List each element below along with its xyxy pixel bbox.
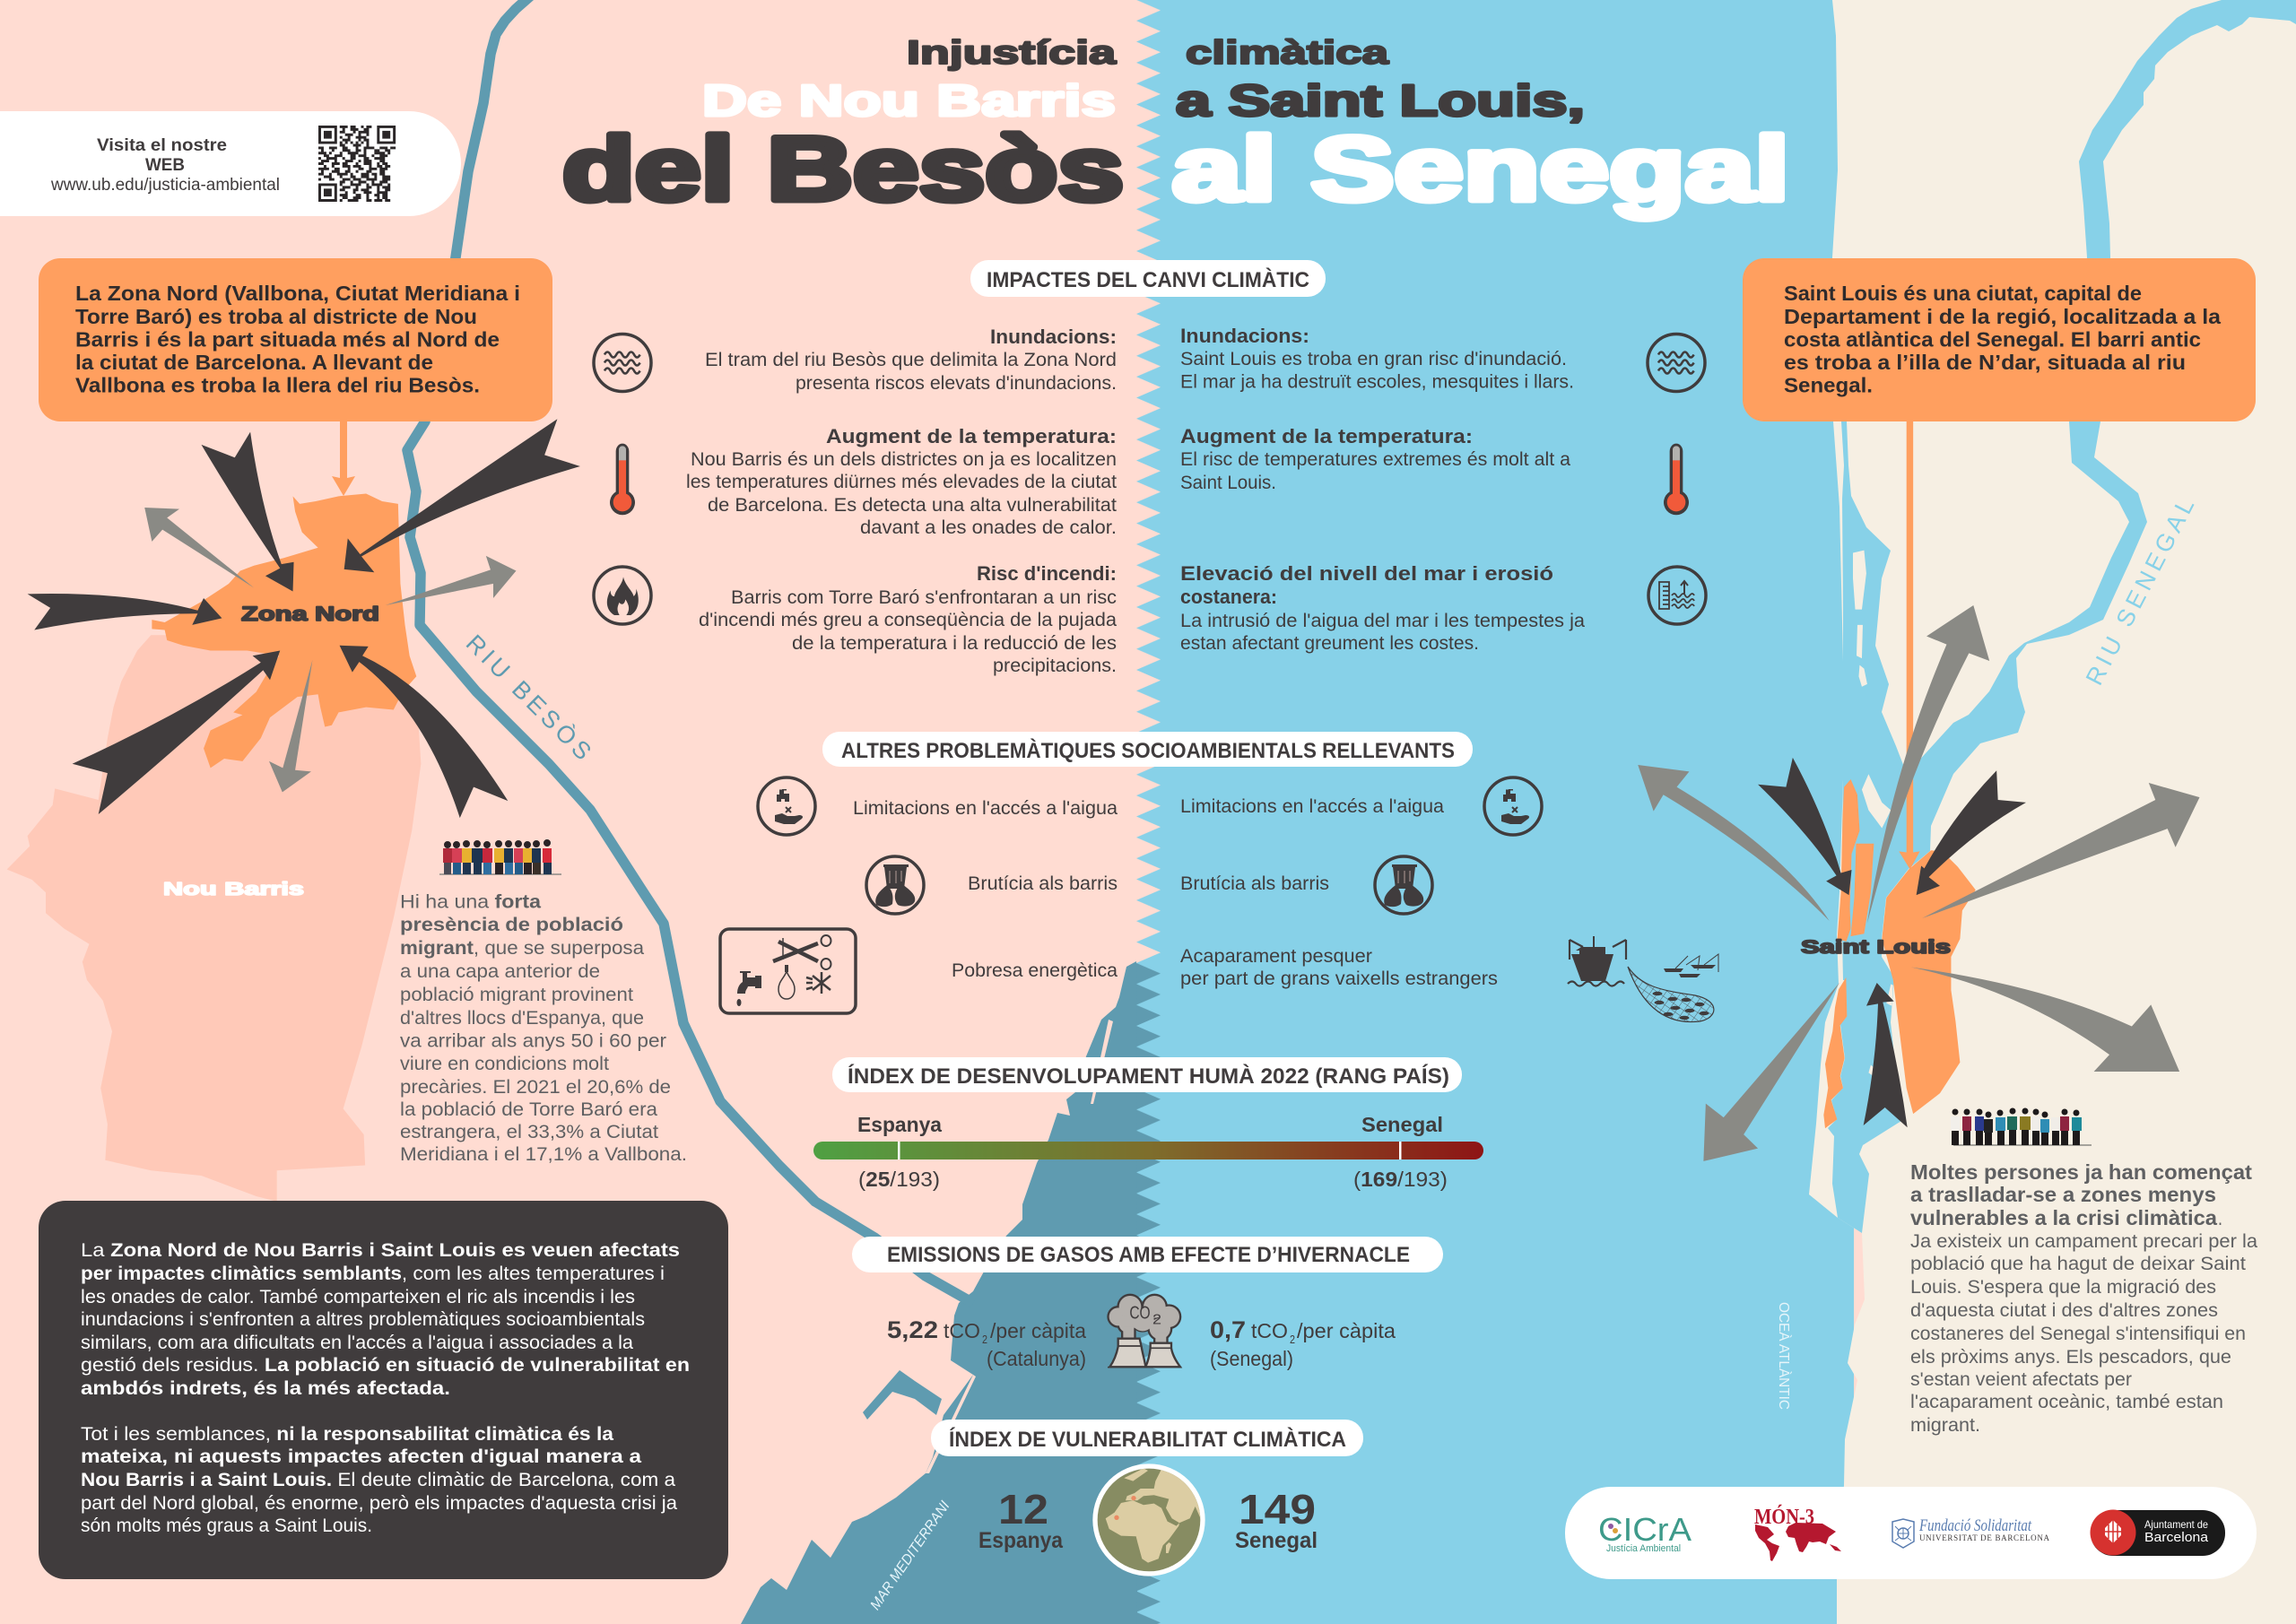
text: població migrant: Hi ha una forta xyxy=(400,891,541,913)
map shape: Nou Barris xyxy=(7,635,421,1202)
arrows: Saint Louis impacts xyxy=(1638,605,2199,1161)
text: emissions Senegal: 2 xyxy=(1290,1333,1295,1346)
text: migració Saint Louis: migrant. xyxy=(1910,1415,1980,1436)
text: impactes Nou Barris: precipitacions. xyxy=(993,656,1117,676)
text: impactes Nou Barris: les temperatures diürnes més elevades de la ciutat xyxy=(686,472,1117,492)
icon: incendi xyxy=(594,567,651,624)
panel: conclusió: per impactes climàtics semblants , com les altes temperatures i xyxy=(81,1264,665,1284)
text: impactes Saint Louis: Inundacions: xyxy=(1180,325,1309,347)
icon: inundacions Saint Louis xyxy=(1648,334,1705,391)
text: emissions Senegal: (Senegal) xyxy=(1210,1347,1293,1370)
text: emissions Catalunya: /per càpita xyxy=(990,1319,1086,1342)
panel: conclusió: similars, com ara dificultats en l'accés a l'aigua i associades a la xyxy=(81,1333,633,1353)
logo: CICrA: Justícia Ambiental xyxy=(1606,1543,1681,1554)
chart: barra IDH xyxy=(813,1113,1483,1191)
stat: Espanya 12 xyxy=(978,1486,1064,1553)
title: De Nou Barris xyxy=(702,77,1116,126)
panel: Zona Nord intro: La Zona Nord (Vallbona, Ciutat Meridiana i xyxy=(75,282,520,305)
text: emissions Senegal: tCO xyxy=(1251,1319,1288,1342)
text: emissions Catalunya: tCO xyxy=(944,1319,980,1342)
text: població migrant: viure en condicions molt xyxy=(400,1054,609,1074)
heading: emissions: EMISSIONS DE GASOS AMB EFECTE D’HIVERNACLE xyxy=(887,1243,1410,1267)
panel: conclusió: són molts més graus a Saint Louis. xyxy=(81,1515,372,1536)
orange arrow to Zona Nord xyxy=(332,417,355,496)
map shapes: Saint Louis xyxy=(1838,779,1976,1114)
panel: conclusió: part del Nord global, és enorme, però els impactes d'aquesta crisi ja xyxy=(81,1493,677,1514)
text: impactes Saint Louis: Saint Louis es troba en gran risc d'inundació. xyxy=(1180,349,1567,369)
text: migració Saint Louis: vulnerables a la crisi climàtica xyxy=(1910,1206,2217,1229)
text: població migrant: població migrant provinent xyxy=(400,985,633,1005)
text: migració Saint Louis: costaneres del Senegal s'intensifiqui en xyxy=(1910,1324,2246,1344)
title xyxy=(562,34,1789,220)
web link panel: WEB xyxy=(145,156,185,175)
panel: conclusió: La Zona Nord de Nou Barris i Saint Louis es veuen afectats xyxy=(81,1240,680,1261)
text: altres problemàtiques: Pobresa energètica xyxy=(952,960,1118,981)
icon: termòmetre Nou Barris xyxy=(610,444,635,515)
panel: Saint Louis intro: Senegal. xyxy=(1784,373,1873,396)
map shape: Zona Nord xyxy=(152,493,416,768)
text: impactes Nou Barris xyxy=(686,326,1117,676)
panel: Zona Nord intro: Vallbona es troba la llera del riu Besòs. xyxy=(75,373,480,396)
text: impactes Nou Barris: Barris com Torre Baró s'enfrontaran a un risc xyxy=(731,587,1117,608)
icon: nivell del mar xyxy=(1648,567,1706,624)
chart: barra IDH: Senegal xyxy=(1361,1113,1443,1136)
icon: vaixell i xarxa de pesca xyxy=(1568,936,1718,1022)
text: impactes Saint Louis: Saint Louis. xyxy=(1180,473,1276,493)
logo: MÓN-3 xyxy=(1754,1505,1841,1561)
text: impactes Nou Barris: El tram del riu Besòs que delimita la Zona Nord xyxy=(705,350,1117,370)
icon: aigua Nou Barris xyxy=(758,777,815,835)
text: migració Saint Louis: l'acaparament oceànic, també estan xyxy=(1910,1392,2223,1412)
text: impactes Nou Barris: Risc d'incendi: xyxy=(977,562,1117,585)
heading: índex de vulnerabilitat: ÍNDEX DE VULNERABILITAT CLIMÀTICA xyxy=(949,1427,1346,1452)
river: Besòs xyxy=(407,0,973,1303)
map label: Nou Barris: Nou Barris xyxy=(163,880,304,899)
text: altres problemàtiques: Limitacions en l'accés a l'aigua xyxy=(1180,796,1444,817)
map label: Riu Senegal: RIU SENEGAL xyxy=(2081,494,2199,690)
stat: Senegal 149: 149 xyxy=(1239,1486,1316,1533)
map label: Riu Besòs: RIU BESÒS xyxy=(461,629,597,765)
islands in river xyxy=(1853,551,1893,1075)
title: Injustícia xyxy=(907,34,1117,71)
chart: barra IDH: (25/193) xyxy=(858,1168,940,1191)
web link panel xyxy=(0,111,461,216)
icon: CO2 xyxy=(1107,1294,1181,1368)
text: altres problemàtiques: Brutícia als barris xyxy=(1180,873,1329,894)
icon: pobresa energètica xyxy=(720,929,856,1013)
text: impactes Saint Louis: El mar ja ha destruït escoles, mesquites i llars. xyxy=(1180,371,1574,393)
people: Saint Louis xyxy=(1951,1108,2092,1145)
sea: Mediterrani xyxy=(741,961,1137,1624)
icon: brutícia Saint Louis xyxy=(1375,856,1432,914)
panel: conclusió: ambdós indrets, és la més afectada. xyxy=(81,1378,450,1399)
logo: MÓN-3: MÓN-3 xyxy=(1754,1505,1814,1529)
icon: brutícia Nou Barris xyxy=(866,856,924,914)
text: emissions Senegal: /per càpita xyxy=(1297,1319,1396,1342)
text: impactes Saint Louis: costanera: xyxy=(1180,586,1277,608)
text: emissions Catalunya xyxy=(887,1316,1086,1370)
heading: emissions xyxy=(852,1237,1443,1272)
text: altres problemàtiques: Acaparament pesquer xyxy=(1180,946,1372,967)
title: del Besòs xyxy=(562,119,1124,220)
text: impactes Nou Barris: de Barcelona. Es detecta una alta vulnerabilitat xyxy=(708,495,1117,516)
text: població migrant: estrangera, el 33,3% a Ciutat xyxy=(400,1122,658,1142)
map label: Zona Nord: Zona Nord xyxy=(241,603,379,625)
panel: Zona Nord intro xyxy=(39,258,552,421)
panel: conclusió: Tot i les semblances, ni la responsabilitat climàtica és la xyxy=(81,1424,613,1445)
icon: globe xyxy=(1092,1463,1208,1576)
stat: Senegal 149 xyxy=(1235,1486,1318,1553)
logo: CICrA: CICrA xyxy=(1598,1511,1692,1548)
icon: termòmetre Saint Louis xyxy=(1664,444,1689,515)
panel: Saint Louis intro: es troba a l’illa de N’dar, situada al riu xyxy=(1784,351,2186,374)
text: població migrant: precàries. El 2021 el 20,6% de xyxy=(400,1077,671,1098)
logo: Ajuntament de Barcelona: Ajuntament de xyxy=(2144,1518,2208,1531)
text: impactes Saint Louis: Elevació del nivell del mar i erosió xyxy=(1180,562,1553,585)
text: impactes Nou Barris: presenta riscos elevats d'inundacions. xyxy=(796,373,1117,394)
chart: barra IDH: Espanya xyxy=(857,1113,942,1136)
people: Barcelona xyxy=(439,839,561,874)
logo: Ajuntament de Barcelona xyxy=(2090,1510,2225,1556)
text: emissions Catalunya: 5,22 xyxy=(887,1316,938,1343)
text: emissions Catalunya: 2 xyxy=(982,1333,987,1346)
zigzag border: sea xyxy=(1136,963,1161,1624)
title: al Senegal xyxy=(1172,119,1789,220)
orange arrow to Saint Louis xyxy=(1899,419,1920,869)
text: emissions Senegal xyxy=(1210,1316,1396,1370)
icon: CO2: CO xyxy=(1129,1303,1151,1324)
panel: Saint Louis intro: Saint Louis és una ciutat, capital de xyxy=(1784,282,2142,305)
text: impactes Saint Louis: La intrusió de l'aigua del mar i les tempestes ja xyxy=(1180,611,1585,631)
heading: altres problemàtiques: ALTRES PROBLEMÀTIQUES SOCIOAMBIENTALS RELLEVANTS xyxy=(841,738,1455,763)
map label: Oceà Atlàntic: OCEÀ ATLÀNTIC xyxy=(1776,1302,1793,1410)
text: impactes Saint Louis xyxy=(1180,325,1585,654)
text: població migrant: presència de població xyxy=(400,915,623,935)
panel: Saint Louis intro: Departament i de la regió, localitzada a la xyxy=(1784,305,2221,328)
web link panel: www.ub.edu/justicia-ambiental xyxy=(50,176,280,195)
text: emissions Senegal: 0,7 xyxy=(1210,1316,1246,1343)
heading: impactes: IMPACTES DEL CANVI CLIMÀTIC xyxy=(987,267,1309,292)
title: a Saint Louis, xyxy=(1176,77,1585,126)
text: població migrant xyxy=(400,891,687,1165)
text: migració Saint Louis: població que ha hagut de deixar Saint xyxy=(1910,1254,2246,1274)
icon: inundacions Nou Barris xyxy=(594,334,651,391)
text: impactes Nou Barris: Nou Barris és un dels districtes on ja es localitzen xyxy=(691,449,1117,470)
heading: índex de vulnerabilitat xyxy=(931,1420,1363,1456)
panel: Saint Louis intro: costa atlàntica del Senegal. El barri antic xyxy=(1784,328,2201,352)
text: impactes Nou Barris: de la temperatura i la reducció de les xyxy=(792,633,1117,654)
river: Senegal xyxy=(1828,0,2296,1233)
heading: impactes xyxy=(970,260,1326,297)
panel: conclusió: inundacions i s'enfronten a altres problemàtiques socioambientals xyxy=(81,1309,645,1330)
panel: Saint Louis intro xyxy=(1743,258,2256,421)
text: impactes Saint Louis: estan afectant greument les costes. xyxy=(1180,633,1479,654)
text: impactes Nou Barris: Inundacions: xyxy=(990,326,1117,348)
text: migració Saint Louis: els pròxims anys. Els pescadors, que xyxy=(1910,1347,2231,1368)
title: climàtica xyxy=(1186,34,1389,71)
text: població migrant: migrant, que se superposa xyxy=(400,938,644,959)
icon: aigua Saint Louis xyxy=(1484,777,1542,835)
text: població migrant: va arribar als anys 50 i 60 per xyxy=(400,1031,666,1051)
port and breakwaters xyxy=(863,1020,1113,1473)
icon: QR code xyxy=(318,126,396,201)
chart: barra IDH: (169/193) xyxy=(1353,1168,1448,1191)
logo: Fundació Solidaritat: Fundació Solidaritat xyxy=(1918,1516,2032,1535)
text: altres problemàtiques: Limitacions en l'accés a l'aigua xyxy=(853,798,1118,819)
heading: índex de desenvolupament humà xyxy=(832,1057,1462,1092)
panel: conclusió: Nou Barris i a Saint Louis. El deute climàtic de Barcelona, com a xyxy=(81,1470,675,1490)
map label: Saint Louis: Saint Louis xyxy=(1801,937,1951,958)
heading: índex de desenvolupament humà: ÍNDEX DE DESENVOLUPAMENT HUMÀ 2022 (RANG PAÍS) xyxy=(848,1064,1449,1089)
text: migració Saint Louis: s'estan veient afectats per xyxy=(1910,1369,2132,1390)
text: altres problemàtiques: Brutícia als barris xyxy=(968,873,1118,894)
panel: conclusió: mateixa, ni aquests impactes afecten d'igual manera a xyxy=(81,1446,641,1467)
text: migració Saint Louis: Louis. S'espera que la migració des xyxy=(1910,1277,2216,1298)
text: altres problemàtiques xyxy=(853,796,1498,989)
text: migració Saint Louis xyxy=(1910,1160,2257,1436)
text: impactes Nou Barris: Augment de la temperatura: xyxy=(826,425,1117,447)
text: impactes Nou Barris: d'incendi més greu a conseqüència de la pujada xyxy=(699,610,1117,630)
text: població migrant: la població de Torre Baró era xyxy=(400,1099,657,1120)
heading: altres problemàtiques xyxy=(822,732,1473,767)
panel: Zona Nord intro: la ciutat de Barcelona. A llevant de xyxy=(75,351,433,374)
panel: conclusió: les onades de calor. També comparteixen el ric als incendis i les xyxy=(81,1287,635,1307)
logo: Fundació Solidaritat xyxy=(1892,1516,2050,1548)
zigzag border: pink xyxy=(1136,0,1161,963)
text: migració Saint Louis: d'aquesta ciutat i des d'altres zones xyxy=(1910,1300,2218,1321)
text: migració Saint Louis: Moltes persones ja han començat xyxy=(1910,1160,2252,1184)
logo: Ajuntament de Barcelona: Barcelona xyxy=(2144,1530,2209,1545)
text: impactes Nou Barris: davant a les onades de calor. xyxy=(860,517,1117,538)
text: migració Saint Louis: . xyxy=(2218,1206,2222,1229)
icon: CO2: 2 xyxy=(1152,1313,1161,1328)
panel: Zona Nord intro: Barris i és la part situada més al Nord de xyxy=(75,328,500,352)
map label: Mar Mediterrani: MAR MEDITERRANI xyxy=(868,1498,953,1613)
text: impactes Saint Louis: El risc de temperatures extremes és molt alt a xyxy=(1180,449,1570,470)
stat: Espanya 12: 12 xyxy=(998,1486,1048,1533)
stat: Espanya 12: Espanya xyxy=(978,1528,1064,1553)
panel: logos xyxy=(1565,1487,2257,1579)
arrows: Zona Nord impacts xyxy=(28,419,580,818)
panel: Zona Nord intro: Torre Baró) es troba al districte de Nou xyxy=(75,305,477,328)
text: població migrant: a una capa anterior de xyxy=(400,961,600,982)
stat: Senegal 149: Senegal xyxy=(1235,1528,1318,1553)
panel: conclusió xyxy=(39,1201,728,1579)
panel: conclusió: gestió dels residus. La població en situació de vulnerabilitat en xyxy=(81,1355,690,1376)
arrow: from south to Saint Louis xyxy=(1864,983,1908,1127)
text: impactes Saint Louis: Augment de la temperatura: xyxy=(1180,425,1473,447)
text: altres problemàtiques: per part de grans vaixells estrangers xyxy=(1180,968,1498,989)
background: blue side xyxy=(1136,0,1854,1624)
text: migració Saint Louis: a traslladar-se a zones menys xyxy=(1910,1183,2216,1206)
land: Senegal coast xyxy=(1809,0,2296,1624)
logo: Fundació Solidaritat: UNIVERSITAT DE BARCELONA xyxy=(1919,1533,2050,1542)
text: migració Saint Louis: Ja existeix un campament precari per la xyxy=(1910,1231,2257,1252)
web link panel: Visita el nostre xyxy=(97,136,227,155)
text: població migrant: d'altres llocs d'Espanya, que xyxy=(400,1008,644,1029)
text: emissions Catalunya: (Catalunya) xyxy=(987,1347,1086,1370)
background: pink side xyxy=(0,0,1136,1624)
text: població migrant: Meridiana i el 17,1% a Vallbona. xyxy=(400,1144,687,1165)
